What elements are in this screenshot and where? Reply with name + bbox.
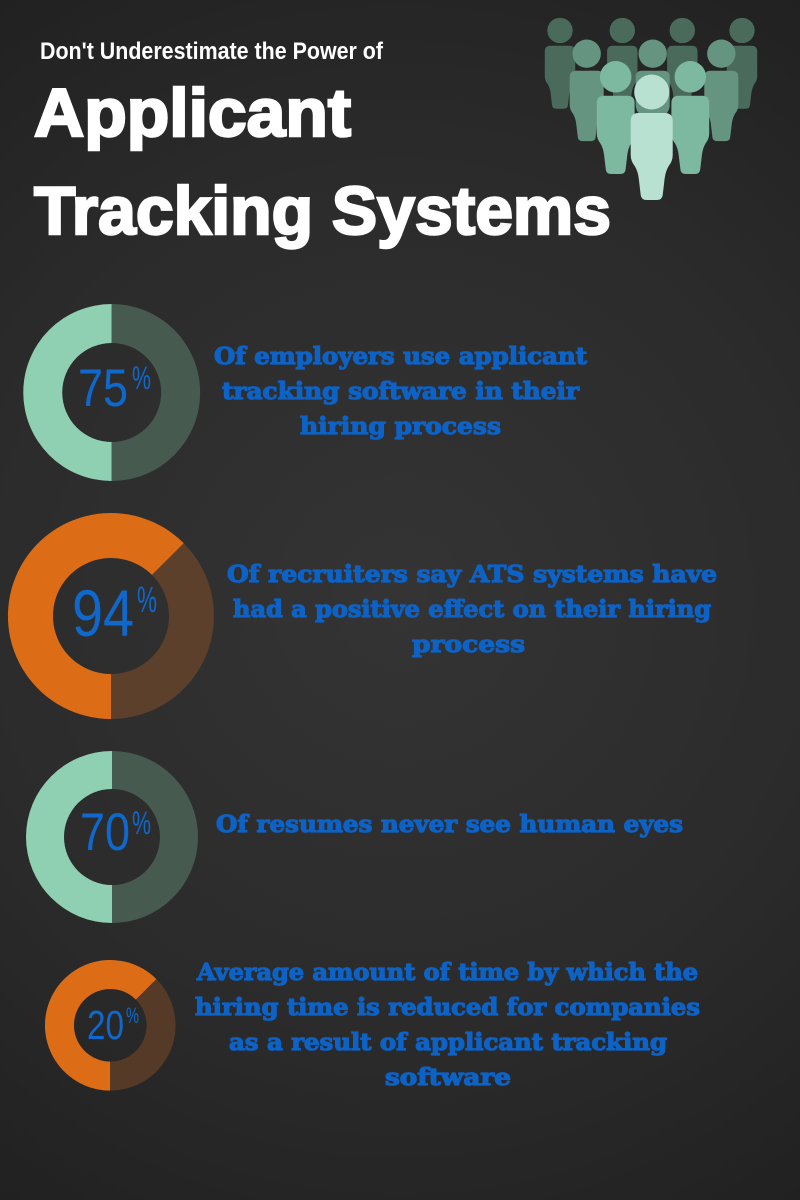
text block: hiring time: hiring time is reduced for companies [195, 994, 700, 1021]
heading: Tracking Systems: Tracking Systems [34, 173, 611, 249]
number: 70%: 70 [80, 803, 130, 862]
icon: group of people [545, 18, 757, 200]
text block: recruiters: process [412, 631, 525, 658]
text block: employers [214, 343, 587, 440]
donut chart: 20% [45, 960, 176, 1091]
text block: recruiters: had a positive effect on their hiring [233, 596, 711, 623]
panel: 70 percent stat [26, 751, 683, 923]
text block: employers: hiring process [300, 413, 501, 440]
panel: 20 percent stat [45, 959, 700, 1091]
text block: employers: Of employers use applicant [214, 343, 587, 370]
number: 75%: % [132, 360, 151, 396]
text block: hiring time: software [385, 1064, 511, 1091]
number: 70%: % [132, 805, 151, 841]
number: 20%: % [126, 1003, 139, 1028]
text block: resumes: Of resumes never see human eyes [216, 811, 683, 838]
donut chart: 94% [8, 513, 214, 719]
number: 94%: % [137, 579, 157, 620]
donut chart: 75% [23, 304, 200, 481]
text block: hiring time: as a result of applicant tracking [229, 1029, 667, 1056]
text block: recruiters: Of recruiters say ATS systems have [227, 561, 717, 588]
number: 75%: 75 [78, 359, 128, 418]
text block: employers: tracking software in their [222, 378, 580, 405]
panel: 94 percent stat [8, 513, 717, 719]
heading: subtitle: Don't Underestimate the Power of [40, 38, 384, 65]
title block [34, 38, 611, 249]
text block: hiring time [195, 959, 700, 1091]
number: 94%: 94 [72, 576, 134, 650]
panel: 75 percent stat [23, 304, 587, 481]
text block: hiring time: Average amount of time by which the [196, 959, 698, 986]
donut chart: 70% [26, 751, 198, 923]
text block: recruiters [227, 561, 717, 658]
heading: Applicant: Applicant [34, 75, 351, 151]
number: 20%: 20 [87, 1002, 124, 1048]
